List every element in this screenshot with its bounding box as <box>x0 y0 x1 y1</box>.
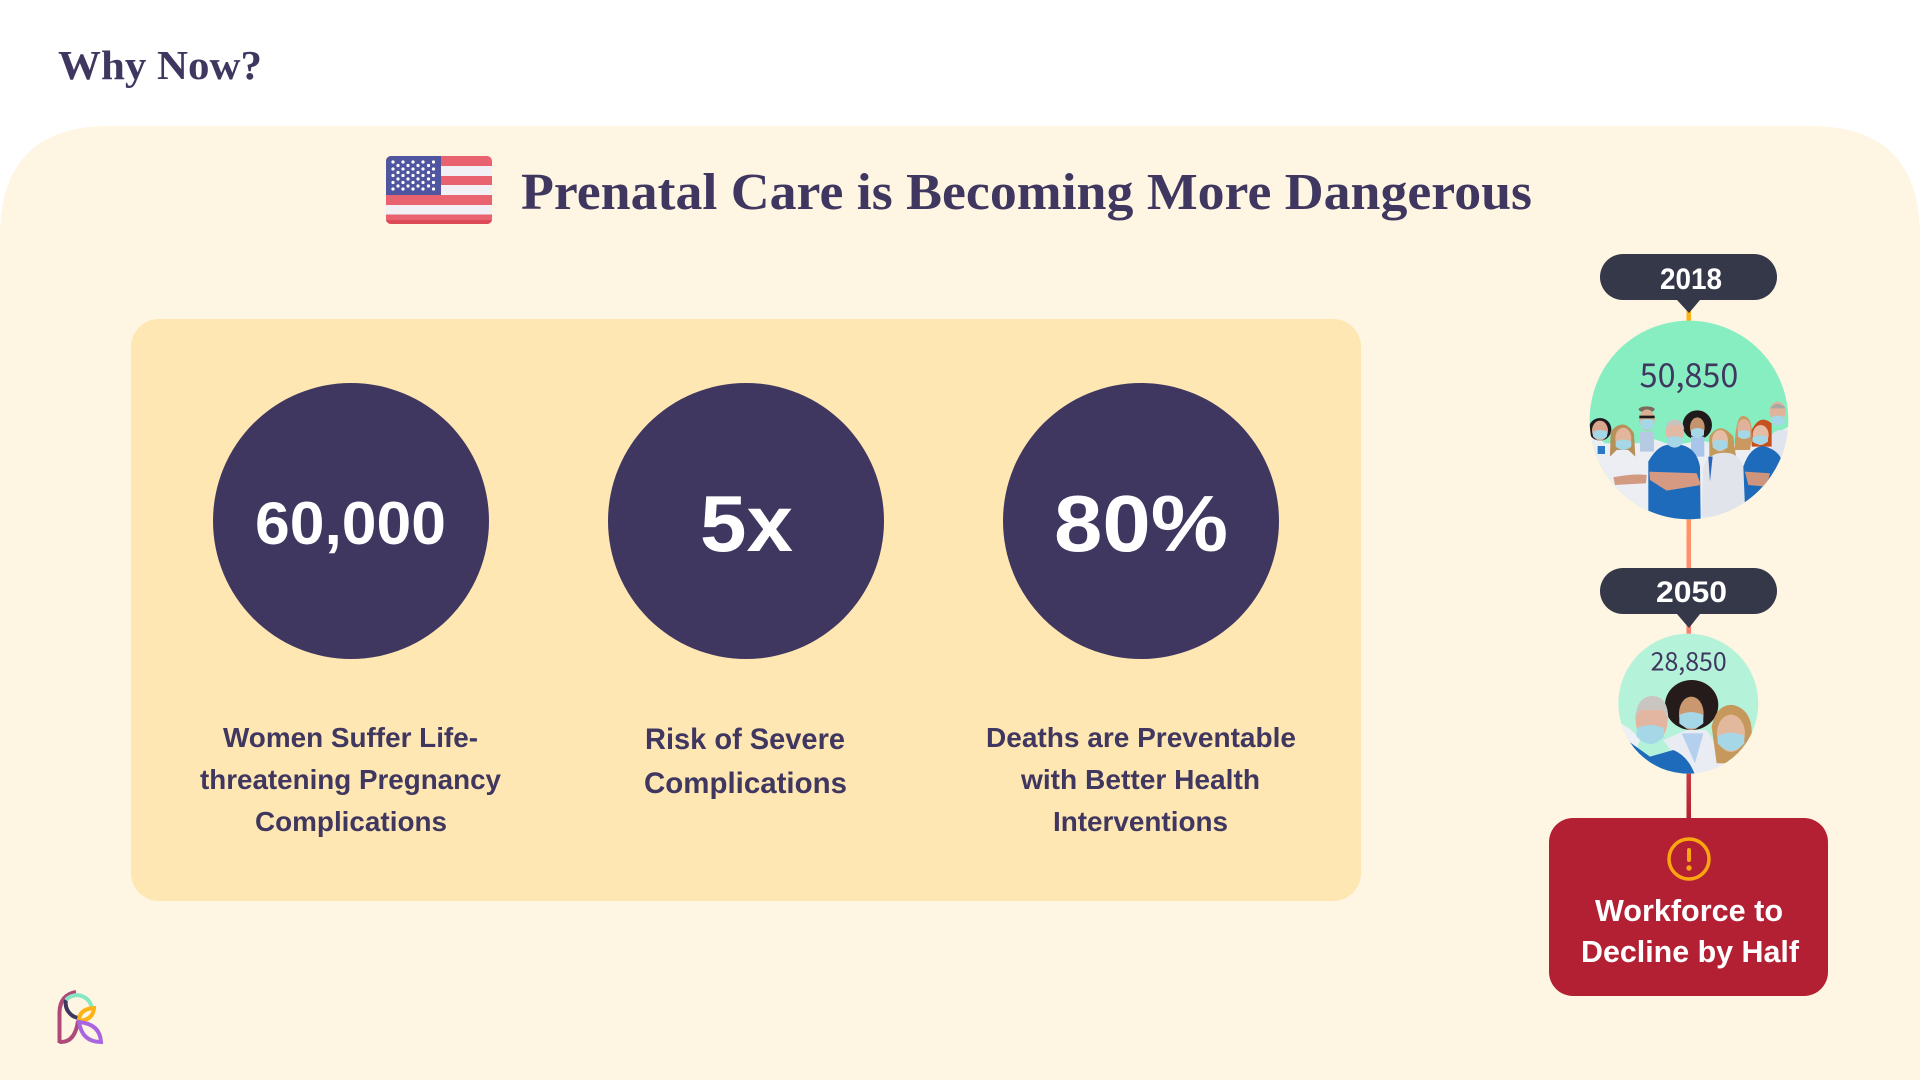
count: 50,850: 50,850 <box>1640 349 1738 397</box>
callout: workforce decline <box>1549 818 1828 996</box>
circle: 2050 workforce <box>1617 634 1758 780</box>
heading: Prenatal Care is Becoming More Dangerous <box>521 164 1532 221</box>
people group 2018 <box>1588 402 1788 520</box>
count: 28,850: 28,850 <box>1651 643 1727 679</box>
label: risk: Complications <box>644 767 847 800</box>
title: Why Now? <box>58 42 262 88</box>
badge: 2018: 2018 <box>1660 263 1722 296</box>
label: deaths: Interventions <box>1053 806 1228 837</box>
people group 2050 <box>1617 680 1752 780</box>
label: women suffer: threatening Pregnancy <box>200 764 501 795</box>
stat: 5x: 5x <box>700 479 793 568</box>
icon: US flag <box>386 156 492 224</box>
icon: logo <box>60 992 101 1043</box>
callout: workforce decline: Decline by Half <box>1581 934 1800 969</box>
stat: 5x <box>608 383 884 659</box>
label: deaths <box>986 722 1296 837</box>
stat: 60,000 <box>213 383 489 659</box>
circle: 2018 workforce <box>1588 321 1788 520</box>
label: risk: Risk of Severe <box>645 723 845 756</box>
label: deaths: with Better Health <box>1020 764 1260 795</box>
timeline connector <box>1686 300 1691 818</box>
label: deaths: Deaths are Preventable <box>986 722 1296 753</box>
stat: 80%: 80% <box>1054 479 1228 568</box>
label: women suffer: Women Suffer Life- <box>223 722 478 753</box>
badge: 2018 <box>1600 254 1777 313</box>
callout: workforce decline: Workforce to <box>1595 893 1783 928</box>
label: risk <box>644 723 847 800</box>
stat: 60,000: 60,000 <box>255 490 446 557</box>
icon: warning <box>1669 839 1709 879</box>
label: women suffer: Complications <box>255 806 447 837</box>
badge: 2050: 2050 <box>1656 576 1727 609</box>
label: women suffer <box>200 722 501 837</box>
stat: 80% <box>1003 383 1279 659</box>
panel: statistics <box>131 319 1361 901</box>
badge: 2050 <box>1600 568 1777 628</box>
